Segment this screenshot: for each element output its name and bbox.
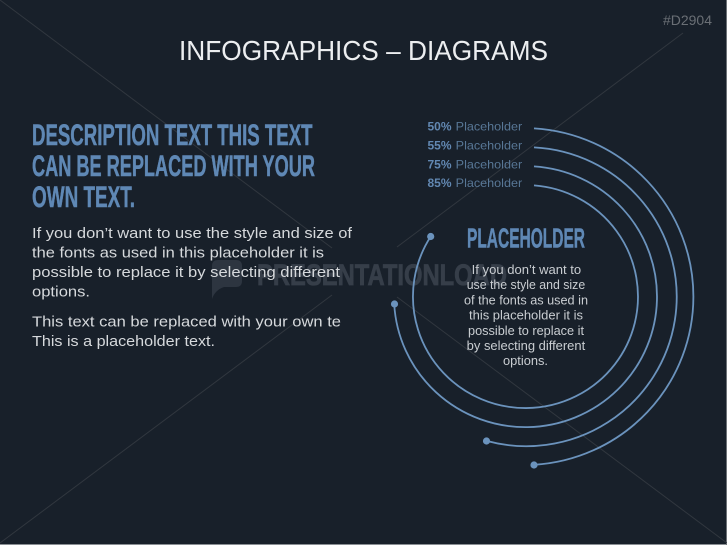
title: INFOGRAPHICS – DIAGRAMS: [179, 35, 548, 66]
center text: possible to replace it: [468, 324, 585, 338]
legend: 85%: [428, 177, 452, 190]
body text: This is a placeholder text.: [32, 333, 215, 350]
center text: If you don’t want to: [472, 263, 581, 277]
heading: description: OWN TEXT.: [32, 181, 135, 214]
heading: description: CAN BE REPLACED WITH YOUR: [32, 150, 315, 183]
center text: use the style and size: [467, 278, 585, 292]
legend: 75%: [428, 158, 452, 171]
center text: by selecting different: [467, 339, 586, 353]
legend: 50%: [428, 121, 452, 134]
heading: description: [32, 119, 315, 214]
legend: [428, 121, 522, 190]
body text: the fonts as used in this placeholder it is: [32, 245, 324, 262]
body text: This text can be replaced with your own te: [32, 314, 341, 331]
legend: Placeholder: [456, 121, 522, 134]
center heading: PLACEHOLDER: [467, 222, 585, 254]
body text: If you don’t want to use the style and size of: [32, 225, 353, 242]
slide id tag: #D2904: [663, 13, 713, 28]
center text: this placeholder it is: [469, 309, 583, 323]
legend: Placeholder: [456, 177, 522, 190]
watermark: [212, 259, 507, 299]
legend: 55%: [428, 140, 452, 152]
body text: options.: [32, 284, 90, 301]
body text: possible to replace it by selecting different: [32, 264, 341, 281]
center text: of the fonts as used in: [464, 293, 588, 307]
concentric arc chart: [391, 128, 693, 469]
heading: description: DESCRIPTION TEXT THIS TEXT: [32, 119, 312, 152]
watermark: PRESENTATIONLOAD: [257, 259, 507, 292]
center text: options.: [503, 354, 548, 368]
center text: [464, 263, 588, 368]
legend: Placeholder: [456, 158, 522, 171]
body text: [32, 225, 353, 350]
legend: Placeholder: [456, 140, 522, 152]
